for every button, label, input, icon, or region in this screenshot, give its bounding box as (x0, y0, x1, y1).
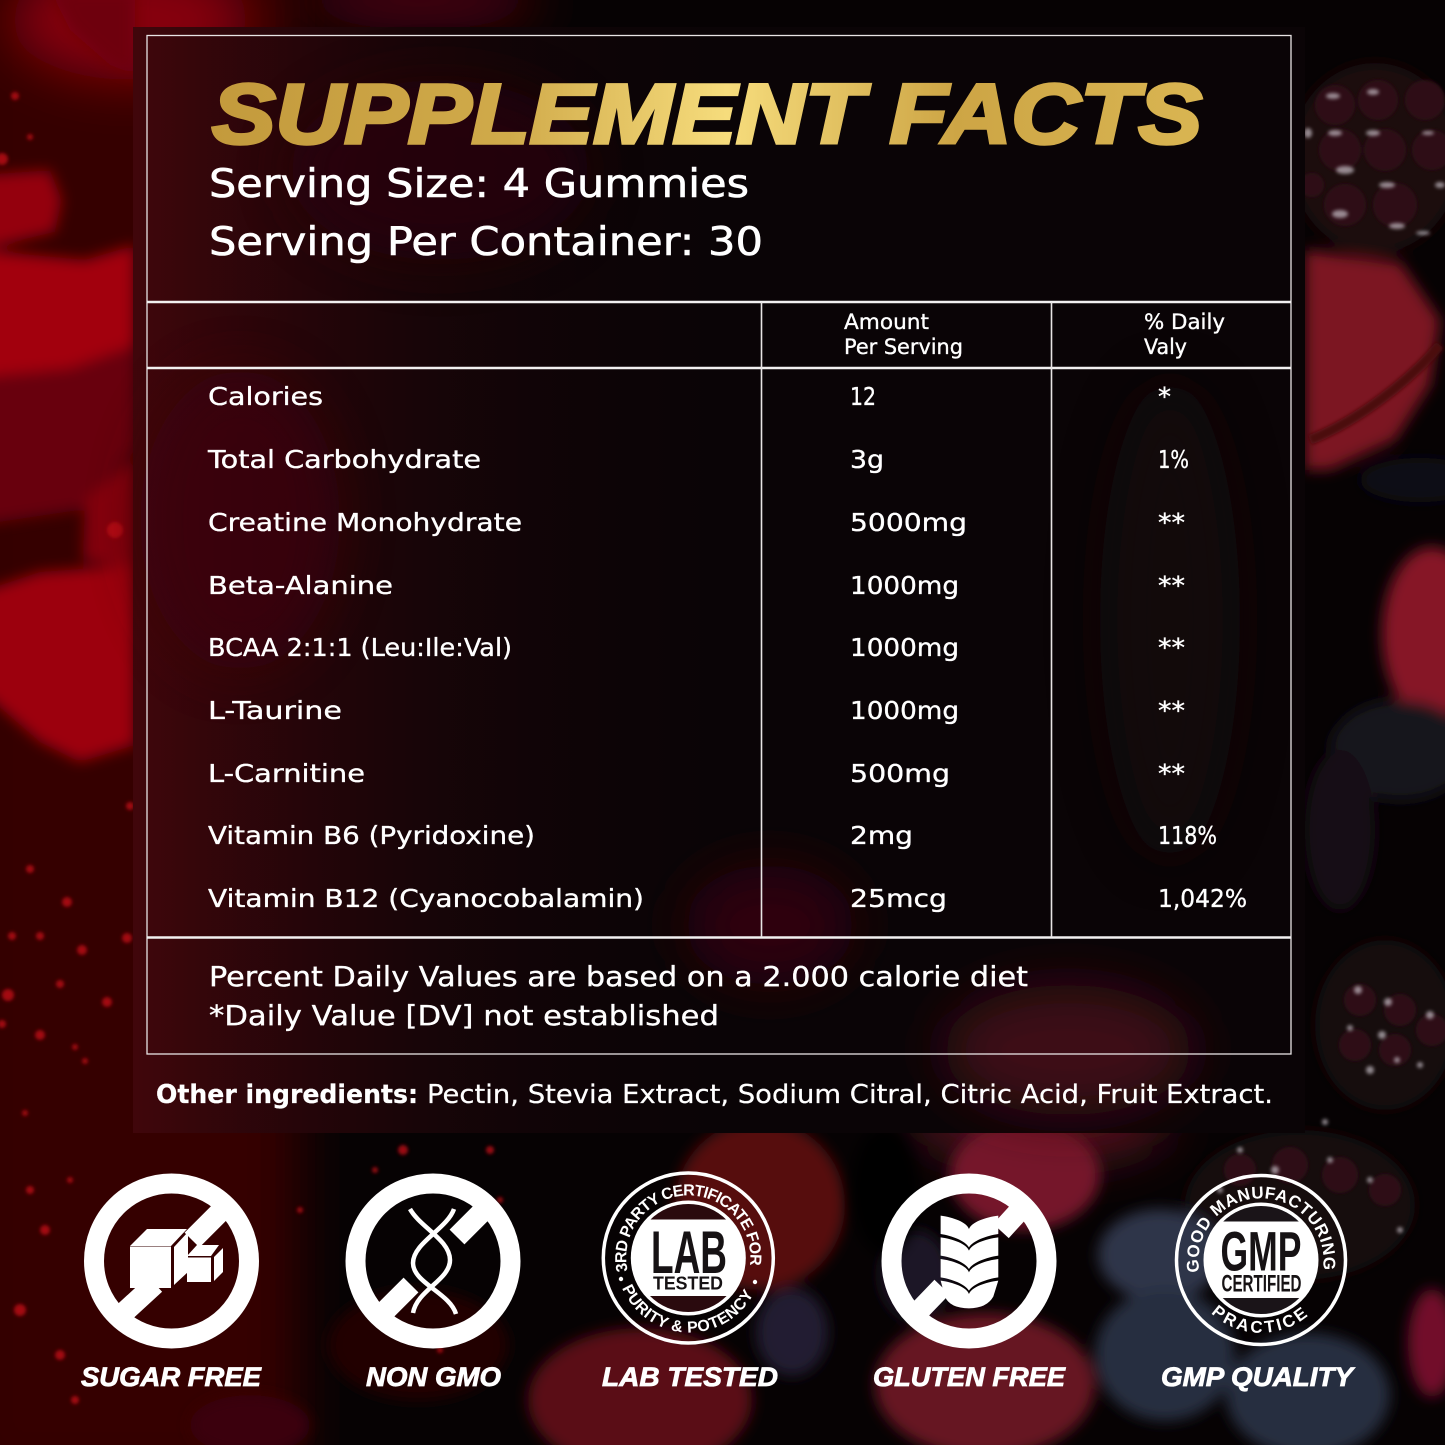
icon: lab tested seal: TESTED (653, 1274, 723, 1294)
ingredient names: Vitamin B12 (Cyanocobalamin) (208, 884, 644, 913)
amounts per serving: 1000mg (850, 633, 959, 662)
amounts per serving: 5000mg (850, 508, 967, 537)
label: LAB TESTED (602, 1362, 778, 1392)
label: SUGAR FREE (81, 1362, 262, 1392)
ingredient names: L-Taurine (208, 696, 342, 725)
left side red zone (0, 0, 300, 1445)
serving information: Serving Per Container: 30 (209, 220, 763, 265)
badge: sugar free (81, 1184, 262, 1392)
badge: non gmo (356, 1184, 510, 1392)
table header: Valy (1144, 335, 1187, 359)
icon: gmp certified seal: PRACTICE (1212, 1304, 1308, 1333)
amounts per serving: 3g (850, 445, 884, 474)
amounts per serving: 25mcg (850, 884, 947, 913)
dark gap on lower part (851, 1125, 919, 1255)
label: GLUTEN FREE (873, 1362, 1066, 1392)
ingredient names: Beta-Alanine (208, 571, 393, 600)
highlights on blackberries (1217, 89, 1445, 1233)
percent daily values (1158, 382, 1247, 913)
percent daily values: ** (1158, 759, 1185, 788)
percent daily values: 1,042% (1158, 884, 1247, 913)
badge: gmp quality (1161, 1174, 1356, 1392)
percent daily values: ** (1158, 508, 1185, 537)
label: NON GMO (366, 1362, 501, 1392)
icon: gmp certified seal: CERTIFIED (1222, 1271, 1302, 1298)
serving information (209, 162, 763, 265)
amounts per serving (850, 382, 967, 913)
percent daily values: 1% (1158, 445, 1189, 474)
icon: prohibited dna (356, 1184, 510, 1338)
footnote (209, 960, 1028, 1032)
ingredient names (207, 382, 644, 913)
other ingredients: Pectin, Stevia Extract, Sodium Citral, Citric Acid, Fruit Extract. (427, 1080, 1273, 1110)
dark translucent panel (133, 27, 1305, 1133)
blackberry drupelets (1224, 80, 1445, 1206)
icon: gmp certified seal (1174, 1174, 1348, 1346)
table header (844, 310, 1225, 359)
percent daily values: ** (1158, 633, 1185, 662)
amounts per serving: 2mg (850, 821, 913, 850)
title: SUPPLEMENT FACTS (212, 67, 1202, 161)
icon: lab tested seal: LAB (651, 1219, 727, 1286)
icon: gmp certified seal: GOOD MANUFACTURING (1186, 1186, 1336, 1272)
amounts per serving: 500mg (850, 759, 950, 788)
badge: gluten free (873, 1184, 1066, 1392)
label: GMP QUALITY (1161, 1362, 1356, 1392)
percent daily values: * (1158, 382, 1171, 411)
amounts per serving: 1000mg (850, 696, 959, 725)
footnote: *Daily Value [DV] not established (209, 999, 719, 1032)
amounts per serving: 1000mg (850, 571, 959, 600)
icon: lab tested seal: PURITY & POTENCY (622, 1284, 752, 1333)
icon: lab tested seal (602, 1171, 776, 1345)
ingredient names: Total Carbohydrate (207, 445, 481, 474)
badge: lab tested (602, 1171, 778, 1392)
supplement facts table frame (147, 36, 1291, 1054)
table header: % Daily (1144, 310, 1225, 334)
percent daily values: ** (1158, 696, 1185, 725)
table header: Amount (844, 310, 929, 334)
right side berries (1290, 63, 1445, 253)
raspberry crease (1310, 345, 1440, 440)
icon: gmp certified seal: GMP (1220, 1220, 1302, 1283)
icon: prohibited sugar cubes (94, 1184, 249, 1338)
percent daily values: ** (1158, 571, 1185, 600)
table header: Per Serving (844, 335, 963, 359)
serving information: Serving Size: 4 Gummies (209, 162, 749, 207)
amounts per serving: 12 (850, 382, 876, 411)
other ingredients: Other ingredients: (156, 1080, 418, 1110)
ingredient names: Calories (208, 382, 323, 411)
ingredient names: L-Carnitine (208, 759, 365, 788)
icon: lab tested seal: 3RD PARTY CERTIFICATE FOR (615, 1184, 762, 1272)
ingredient names: BCAA 2:1:1 (Leu:Ile:Val) (208, 633, 512, 662)
ingredient names: Creatine Monohydrate (208, 508, 522, 537)
icon: prohibited wheat (892, 1184, 1046, 1338)
bright speckles on the left (0, 92, 503, 1404)
footnote: Percent Daily Values are based on a 2.000 calorie diet (209, 960, 1028, 993)
percent daily values: 118% (1158, 821, 1217, 850)
ingredient names: Vitamin B6 (Pyridoxine) (208, 821, 535, 850)
